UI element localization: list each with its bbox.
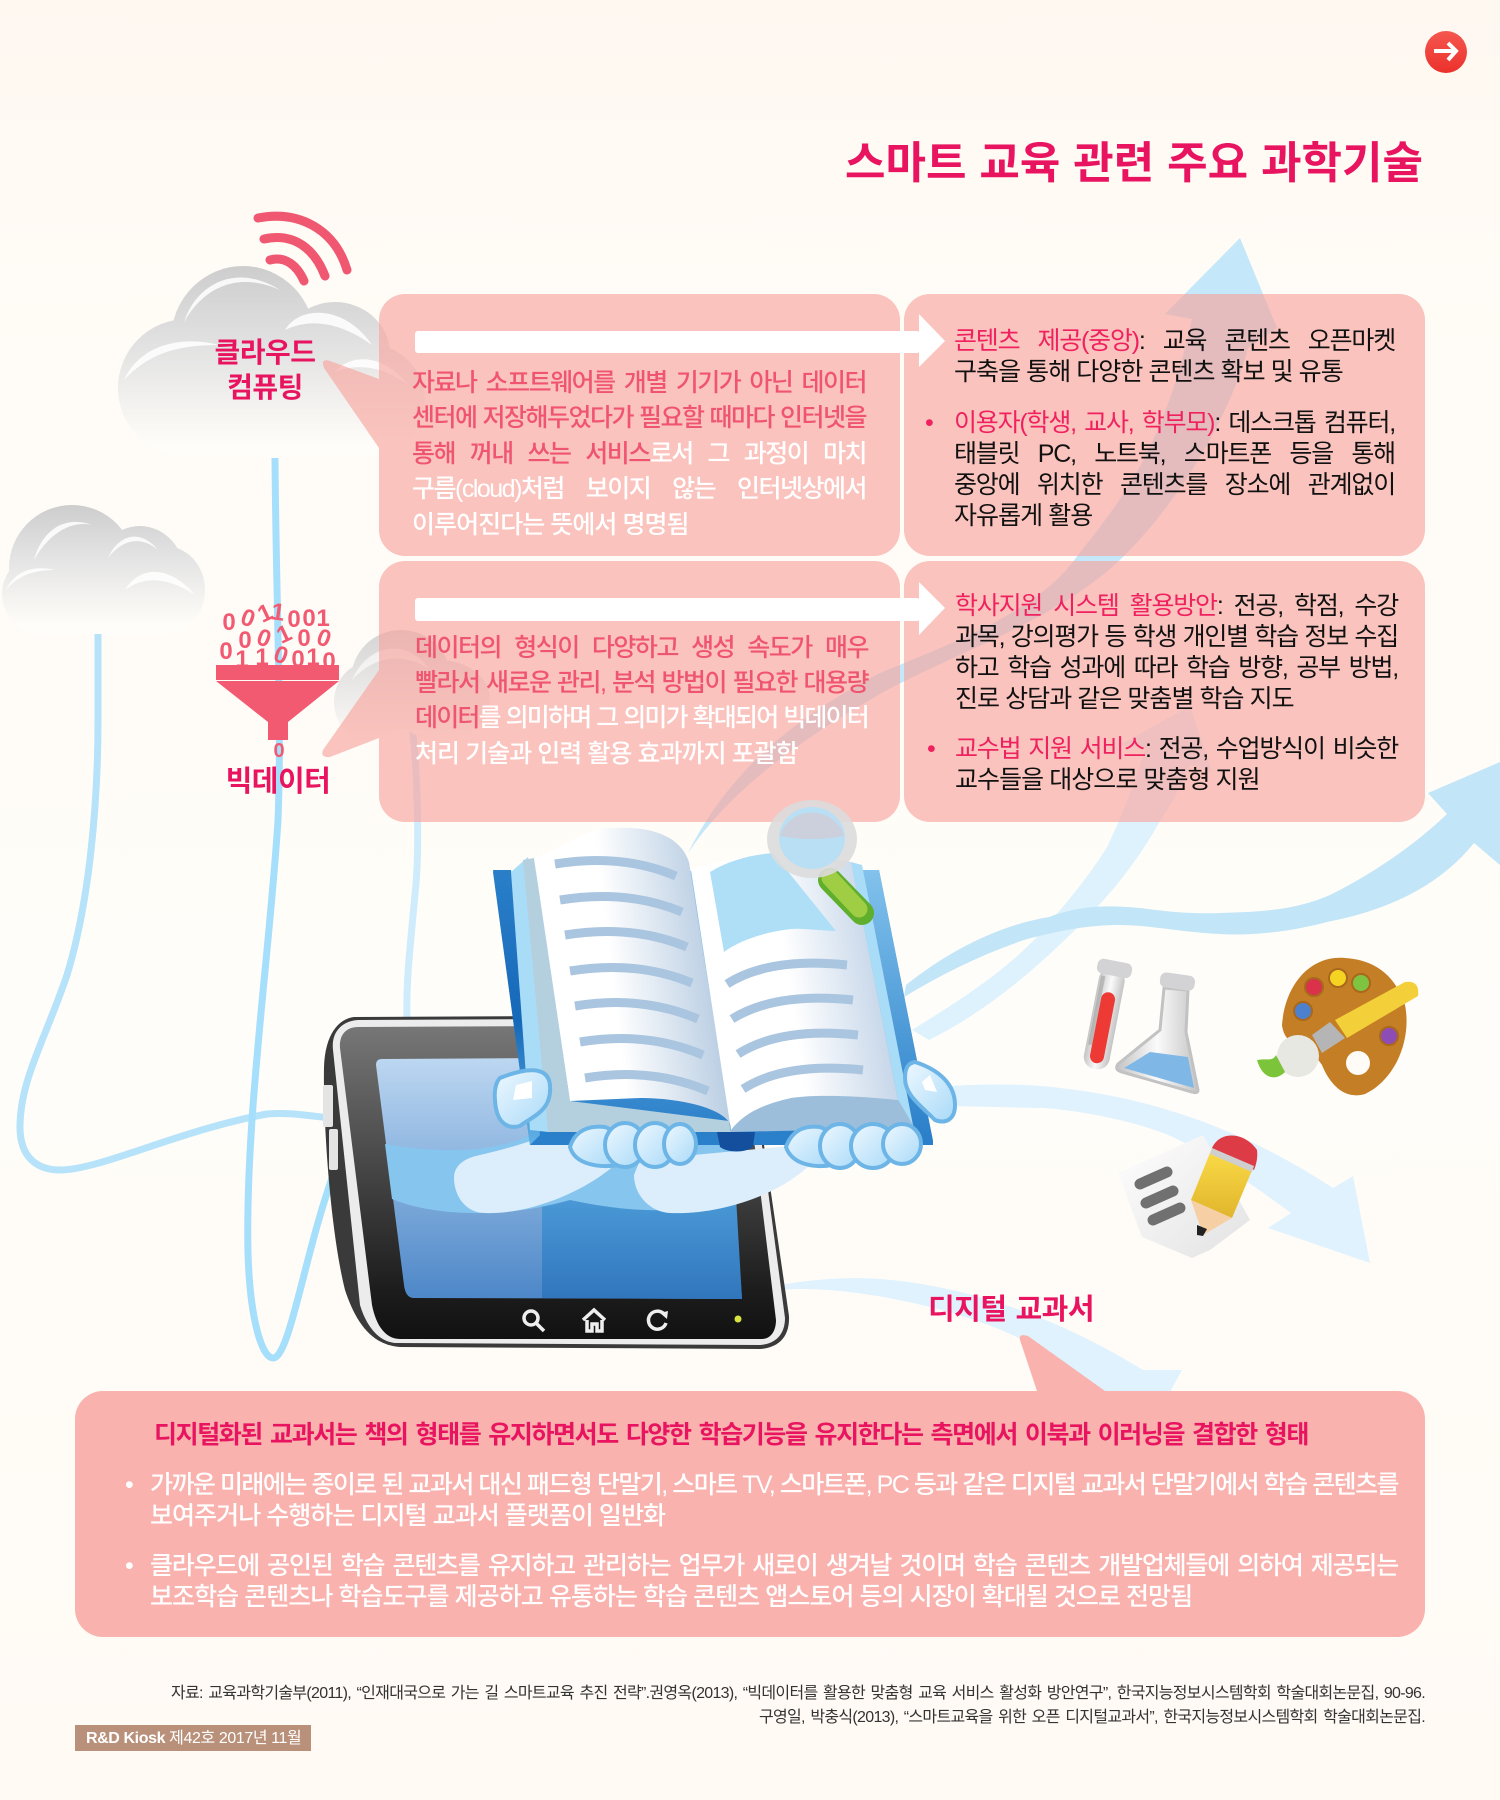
icon: big data funnel with digits: 1 <box>306 644 320 671</box>
text: 콘텐츠 제공(중앙): 교육 콘텐츠 오픈마켓 <box>954 327 1395 355</box>
text: 하고 학습 성과에 따라 학습 방향, 공부 방법, <box>955 654 1398 682</box>
tablet screen <box>376 1057 812 1299</box>
tablet status light <box>734 1316 742 1322</box>
left page <box>534 828 731 1126</box>
icon: second cloud <box>2 505 205 634</box>
text: 빨라서 새로운 관리, 분석 방법이 필요한 대용량 <box>415 669 868 697</box>
text: 자료: 교육과학기술부(2011), “인재대국으로 가는 길 스마트교육 추진 전략”.권영옥(2013), “빅데이터를 활용한 맞춤형 교육 서비스 활성화 방안연구”, 한국지능정보시스템학회 학술대회논문집, 90-96. <box>171 1685 1425 1702</box>
text: 처리 기술과 인력 활용 효과까지 포괄함 <box>415 740 798 768</box>
text: 교수법 지원 서비스: 전공, 수업방식이 비슷한 <box>955 735 1398 763</box>
title: 스마트 교육 관련 주요 과학기술 <box>845 139 1423 188</box>
icon: big data funnel with digits: 1 <box>235 646 249 673</box>
text: 구름(cloud)처럼 보이지 않는 인터넷상에서 <box>412 475 866 503</box>
text: • <box>927 735 935 763</box>
icon: paint palette and brush <box>1257 958 1418 1095</box>
label: big data: 빅데이터 <box>226 766 330 798</box>
text: 구축을 통해 다양한 콘텐츠 확보 및 유통 <box>954 358 1343 386</box>
text: big data definition <box>415 634 869 768</box>
text: big data applications <box>927 592 1398 794</box>
text: 과목, 강의평가 등 학생 개인별 학습 정보 수집 <box>955 623 1398 651</box>
icon: big data funnel with digits: 1 <box>272 619 296 650</box>
connector line: third cloud to tablet <box>407 700 418 1018</box>
icon: next arrow button <box>1425 31 1467 73</box>
icon: big data funnel with digits: 0 <box>287 606 301 633</box>
icon: big data funnel with digits: 0 <box>291 646 305 673</box>
text: cloud computing definition <box>412 369 866 539</box>
icon: tablet device <box>323 1015 812 1349</box>
text: 이용자(학생, 교사, 학부모): 데스크톱 컴퓨터, <box>954 409 1395 437</box>
icon: test tube and flask <box>1078 958 1198 1093</box>
text: digital textbook summary <box>125 1421 1398 1611</box>
text: sources <box>171 1684 1425 1726</box>
text: 교수들을 대상으로 맞춤형 지원 <box>955 766 1260 794</box>
hands <box>495 1062 955 1168</box>
text: 자료나 소프트웨어를 개별 기기가 아닌 데이터 <box>412 369 866 397</box>
text: 센터에 저장해두었다가 필요할 때마다 인터넷을 <box>412 404 866 432</box>
panel: cloud computing applications <box>904 294 1425 556</box>
text: 컴퓨팅 <box>227 372 303 403</box>
icon: big data funnel with digits: 1 <box>253 598 277 629</box>
panel: digital textbook summary with pointer <box>75 1335 1425 1637</box>
text: 보조학습 콘텐츠나 학습도구를 제공하고 유통하는 학습 콘텐츠 앱스토어 등의 시장이 확대될 것으로 전망됨 <box>150 1583 1192 1611</box>
text: 가까운 미래에는 종이로 된 교과서 대신 패드형 단말기, 스마트 TV, 스마트폰, PC 등과 같은 디지털 교과서 단말기에서 학습 콘텐츠를 <box>150 1471 1398 1499</box>
text: • <box>925 409 933 437</box>
panel: big data applications <box>904 561 1425 822</box>
text: publication label: R&D Kiosk 제42호 2017년 11월 <box>86 1730 301 1747</box>
right page <box>691 853 898 1130</box>
badge: publication label <box>75 1725 311 1751</box>
icon: magnifying glass <box>767 800 862 913</box>
text: 데이터의 형식이 다양하고 생성 속도가 매우 <box>415 634 868 662</box>
panel: cloud computing definition with pointer <box>323 294 900 556</box>
icon: big data funnel with digits: 0 <box>237 603 259 633</box>
arrow: downward right band <box>950 1085 1370 1263</box>
arrow: white cloud computing arrow <box>415 314 945 367</box>
tablet side buttons <box>323 1085 338 1170</box>
icon: big data funnel with digits: 1 <box>255 644 269 671</box>
text: 자유롭게 활용 <box>954 502 1092 530</box>
text: 진로 상담과 같은 맞춤별 학습 지도 <box>955 685 1294 713</box>
text: 디지털화된 교과서는 책의 형태를 유지하면서도 다양한 학습기능을 유지한다는 측면에서 이북과 이러닝을 결합한 형태 <box>154 1421 1308 1449</box>
arrow: white big data arrow <box>415 582 945 635</box>
icon: big data funnel with digits: 1 <box>269 598 286 627</box>
text: cloud computing applications <box>925 327 1395 530</box>
label: cloud computing <box>214 337 316 403</box>
text: 태블릿 PC, 노트북, 스마트폰 등을 통해 <box>954 440 1395 468</box>
icon: big data funnel with digits: 0 <box>273 740 285 762</box>
text: 학사지원 시스템 활용방안: 전공, 학점, 수강 <box>955 592 1398 620</box>
text: • <box>125 1552 133 1580</box>
text: 통해 꺼내 쓰는 서비스로서 그 과정이 마치 <box>412 440 866 468</box>
icon: note and pencil <box>1118 1135 1257 1258</box>
arrow: right-pointing band <box>904 762 1500 997</box>
icon: big data funnel with digits: 0 <box>297 625 311 652</box>
label: digital textbook: 디지털 교과서 <box>928 1294 1094 1326</box>
icon: wifi signal <box>258 216 347 281</box>
icon: big data funnel with digits: 0 <box>238 627 252 654</box>
connector line: second cloud to tablet <box>20 630 330 1170</box>
icon: big data funnel with digits: 0 <box>219 638 233 665</box>
text: 보여주거나 수행하는 디지털 교과서 플랫폼이 일반화 <box>150 1502 665 1530</box>
text: 데이터를 의미하며 그 의미가 확대되어 빅데이터 <box>415 704 868 732</box>
text: • <box>125 1471 133 1499</box>
icon: first cloud with wifi <box>118 216 425 457</box>
text: 구영일, 박충식(2013), “스마트교육을 위한 오픈 디지털교과서”, 한국지능정보시스템학회 학술대회논문집. <box>759 1709 1425 1726</box>
text: 클라우드에 공인된 학습 콘텐츠를 유지하고 관리하는 업무가 새로이 생겨날 것이며 학습 콘텐츠 개발업체들에 의하여 제공되는 <box>150 1552 1398 1580</box>
icon: third cloud <box>334 630 490 742</box>
panel: big data definition with pointer <box>322 561 900 822</box>
icon: big data funnel with digits: 0 <box>270 640 292 670</box>
tablet controls <box>524 1310 668 1331</box>
icon: big data funnel with digits: 0 <box>322 648 336 675</box>
hand highlights <box>513 1075 937 1100</box>
icon: big data funnel with digits: 0 <box>302 605 316 632</box>
connector line: first cloud to tablet <box>248 458 335 1358</box>
icon: big data funnel with digits: 1 <box>316 605 330 632</box>
icon: open book held by hands <box>493 828 955 1168</box>
icon: big data funnel with digits: 0 <box>222 609 236 636</box>
icon: big data funnel with digits: 0 <box>253 623 275 653</box>
icon: big data funnel with digits <box>216 598 339 762</box>
text: 중앙에 위치한 콘텐츠를 장소에 관계없이 <box>954 471 1395 499</box>
text: 클라우드 <box>214 337 316 368</box>
arrow: lower rising band <box>912 706 1212 1040</box>
icon: big data funnel with digits: 0 <box>313 623 335 653</box>
text: 이루어진다는 뜻에서 명명됨 <box>412 511 689 539</box>
arrow: large upward band <box>688 238 1277 853</box>
arrow: band to digital textbook <box>731 1278 1182 1392</box>
